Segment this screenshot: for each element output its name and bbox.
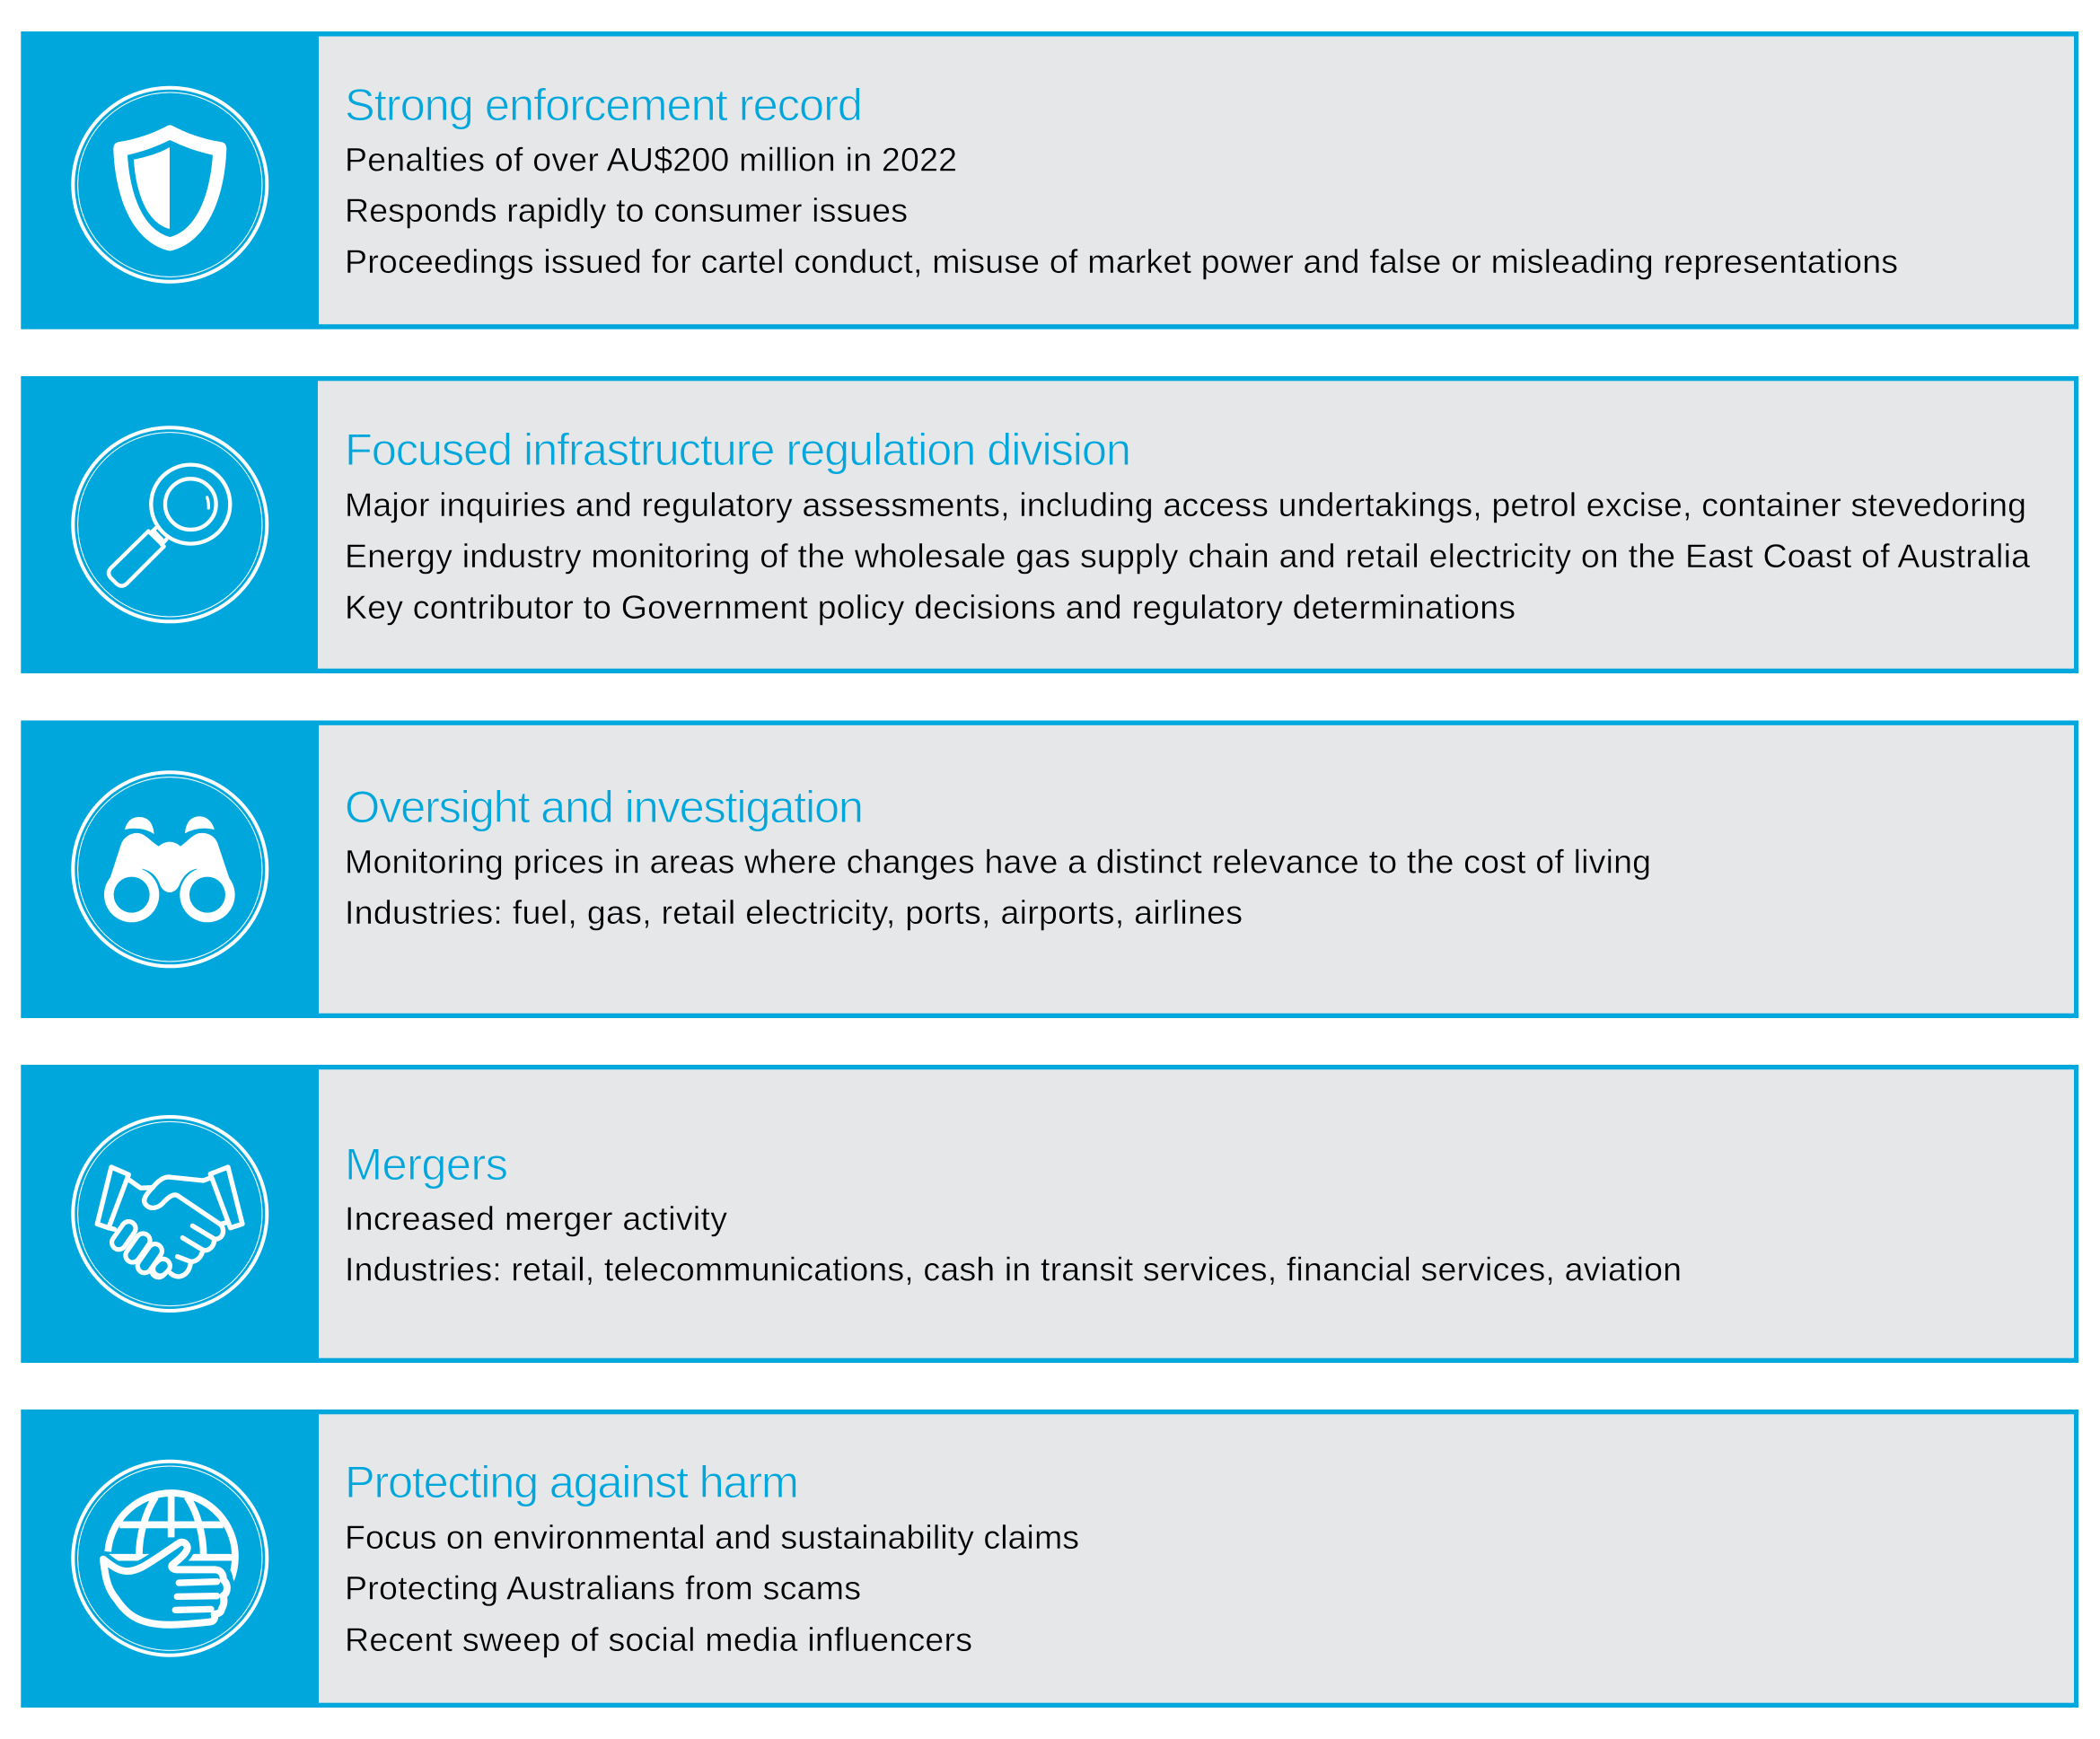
heading: Oversight and investigation [345, 781, 864, 832]
panel: mergers [21, 1065, 2078, 1363]
heading: Protecting against harm [345, 1456, 799, 1507]
body text: Major inquiries and regulatory assessments, including access undertakings, petrol excise, container stevedoring [345, 486, 2026, 523]
heading: Strong enforcement record [345, 79, 863, 130]
body text [345, 486, 2030, 626]
body text [345, 1199, 1682, 1288]
icon: handshake [73, 1117, 267, 1311]
body text: Increased merger activity [345, 1199, 727, 1237]
panel: focused infrastructure regulation division [21, 376, 2078, 673]
body text: Monitoring prices in areas where changes have a distinct relevance to the cost of living [345, 843, 1651, 881]
heading: Focused infrastructure regulation division [345, 424, 1131, 475]
body text [345, 1518, 1079, 1658]
icon: binoculars [73, 772, 267, 966]
body text: Industries: retail, telecommunications, cash in transit services, financial services, aviation [345, 1251, 1682, 1288]
icon: magnifying glass [73, 427, 267, 621]
panel: oversight and investigation [21, 720, 2078, 1018]
body text: Recent sweep of social media influencers [345, 1620, 972, 1658]
body text: Key contributor to Government policy decisions and regulatory determinations [345, 588, 1516, 626]
body text: Industries: fuel, gas, retail electricity, ports, airports, airlines [345, 893, 1243, 931]
panel: protecting against harm [21, 1410, 2078, 1708]
body text [345, 843, 1651, 931]
icon: globe and hand [73, 1462, 267, 1656]
body text: Energy industry monitoring of the wholesale gas supply chain and retail electricity on the East Coast of Australia [345, 537, 2030, 575]
body text [345, 141, 1898, 280]
body text: Focus on environmental and sustainability claims [345, 1518, 1079, 1556]
body text: Proceedings issued for cartel conduct, misuse of market power and false or misleading representations [345, 242, 1898, 280]
body text: Penalties of over AU$200 million in 2022 [345, 141, 957, 179]
body text: Protecting Australians from scams [345, 1569, 861, 1607]
panel: strong enforcement record [21, 31, 2078, 329]
icon: shield [73, 88, 267, 282]
heading: Mergers [345, 1138, 508, 1190]
body text: Responds rapidly to consumer issues [345, 191, 908, 229]
